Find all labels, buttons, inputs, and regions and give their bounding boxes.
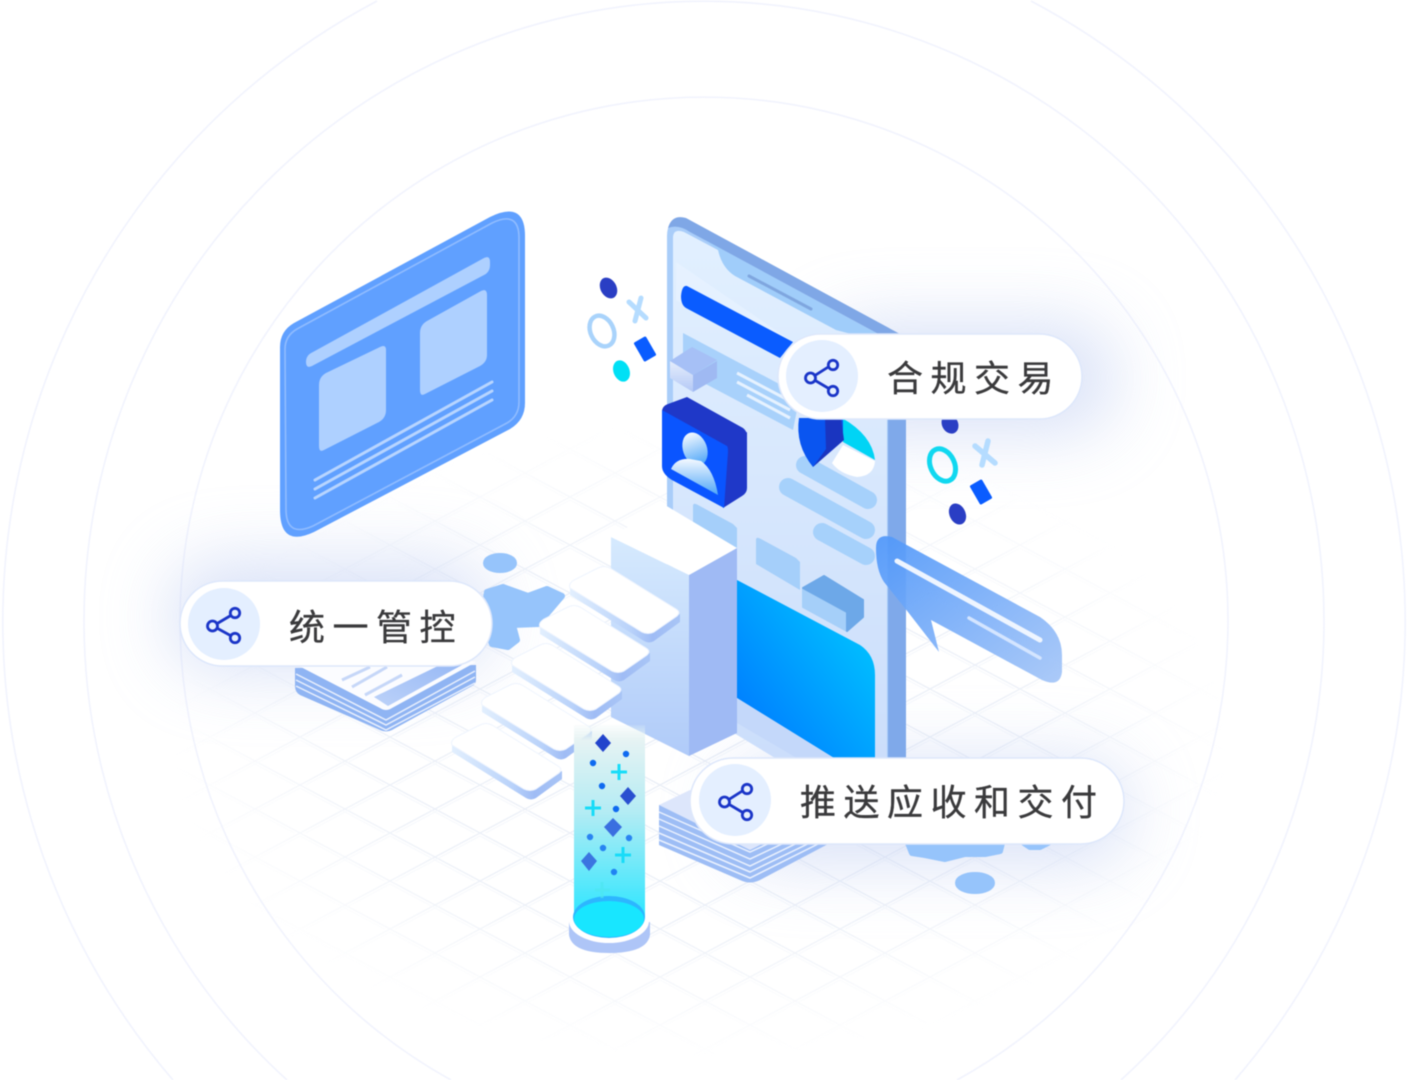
step card 4 (540, 606, 650, 682)
person silhouette (671, 429, 718, 495)
panel: floating web page card (280, 212, 525, 537)
icon: user profile cube (662, 397, 747, 508)
plus signs (585, 764, 631, 898)
step card 1 (452, 724, 562, 800)
chat bubble (876, 536, 1062, 683)
tube base (569, 922, 650, 953)
step card 5 (570, 566, 680, 642)
page left image block (319, 346, 386, 451)
chat text lines (897, 561, 1040, 640)
phone top edge (668, 217, 900, 338)
small box on screen (803, 576, 863, 631)
floating shapes left (585, 275, 657, 384)
pill glow shadows (170, 322, 1130, 864)
isometric ground grid (292, 496, 1112, 985)
small cube (670, 347, 717, 392)
callout: 合规交易 (778, 334, 1082, 419)
floating shapes right (924, 411, 995, 527)
page right image block (420, 290, 487, 395)
puzzle blob shapes (482, 556, 1048, 891)
document stack left (295, 640, 476, 732)
step card 2 (482, 684, 592, 760)
tube glowing floor (573, 896, 645, 938)
label: 合规交易 (887, 358, 1061, 399)
document stack right (659, 790, 830, 882)
pie chart (798, 418, 875, 477)
blue content panel (737, 580, 875, 770)
callout: 推送应收和交付 (690, 758, 1124, 844)
pale area under blue panel (737, 698, 834, 760)
icon: share (188, 588, 260, 660)
stacked white step cards (452, 566, 680, 800)
dots (587, 751, 632, 875)
phone notch (705, 240, 885, 338)
step card 3 (512, 644, 622, 720)
page header bar (306, 257, 490, 367)
phone (667, 217, 906, 835)
card on screen (683, 333, 800, 430)
screen light stripe (676, 262, 790, 350)
particle tube (569, 725, 650, 953)
diamonds (581, 734, 636, 871)
screen list bars (788, 465, 868, 556)
icon: share (786, 340, 858, 412)
phone body (667, 220, 906, 835)
phone right strip (888, 345, 906, 835)
page text lines (315, 382, 492, 498)
screen small blocks (693, 504, 737, 553)
icon: share (699, 764, 771, 836)
callout: 统一管控 (180, 581, 492, 666)
phone screen (673, 231, 887, 826)
tube beam (574, 725, 645, 917)
header bar on screen (681, 286, 793, 358)
white column block (611, 505, 737, 756)
label: 推送应收和交付 (800, 782, 1105, 823)
label: 统一管控 (289, 607, 463, 648)
